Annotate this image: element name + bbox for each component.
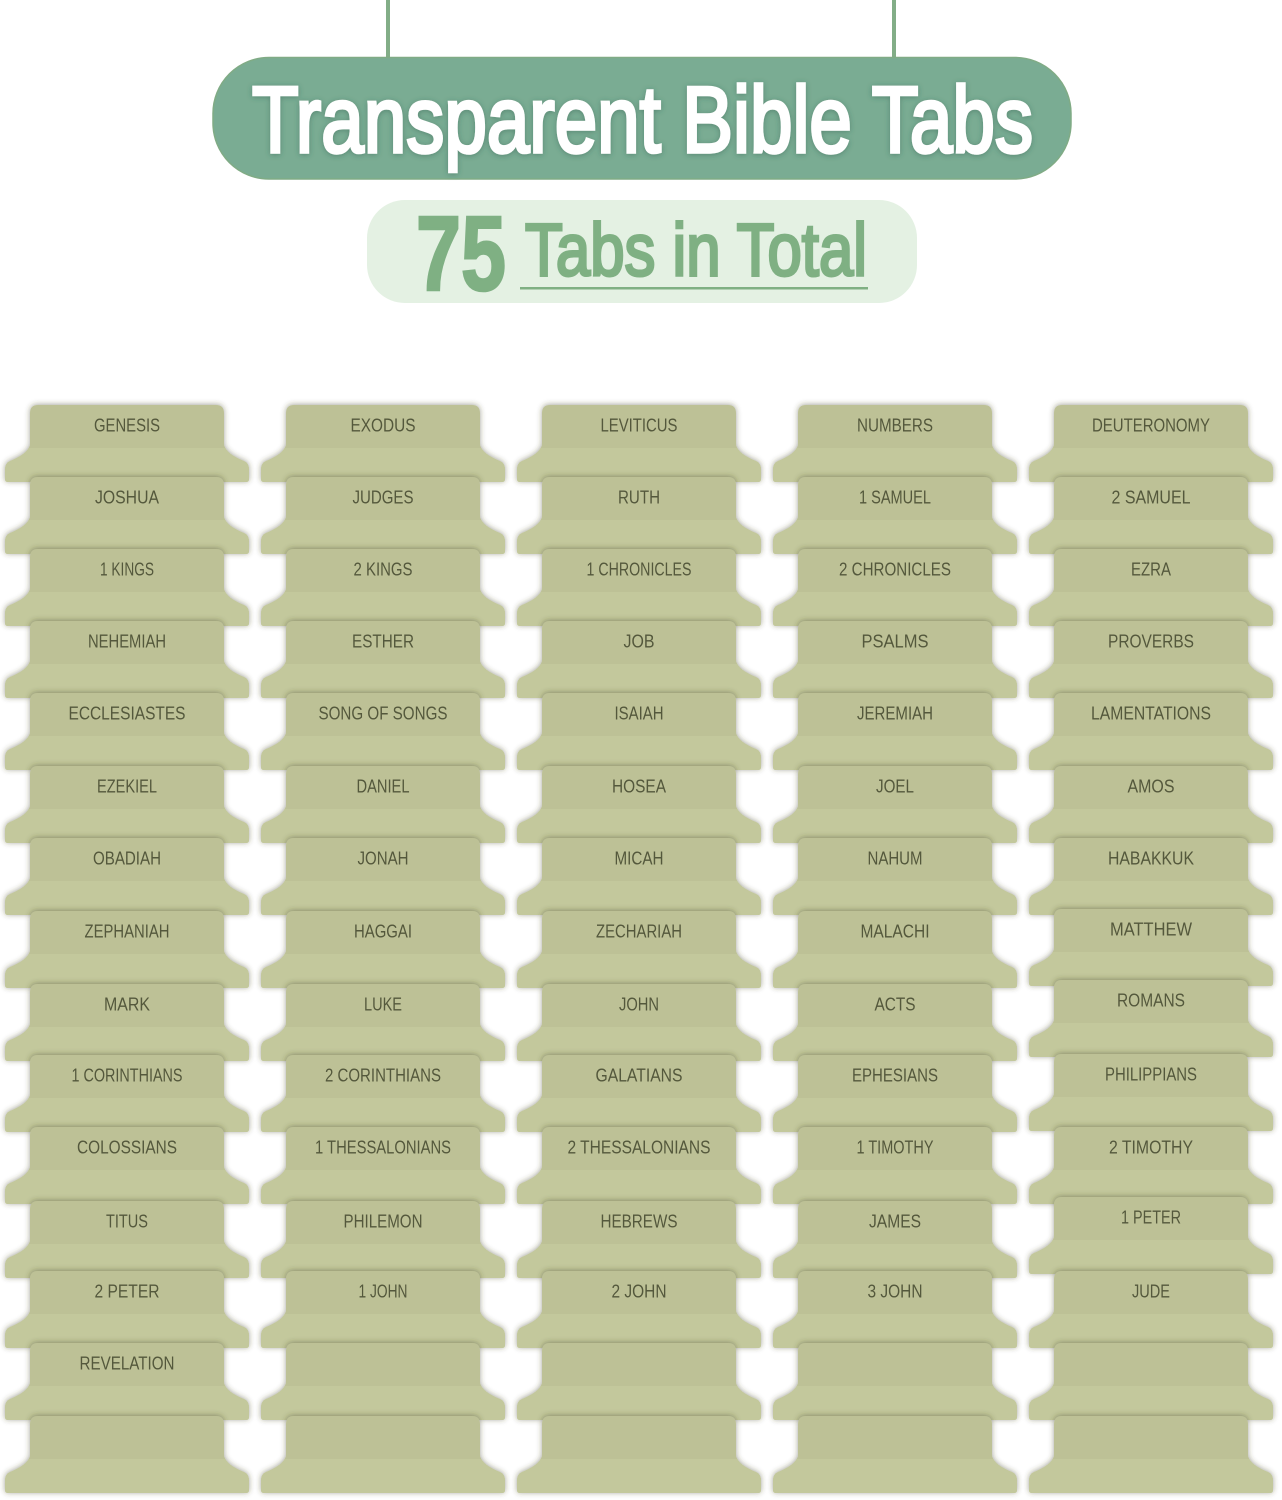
tab: Nahum	[772, 838, 1018, 916]
tab: Titus	[4, 1201, 250, 1279]
tab: 1 Timothy	[772, 1127, 1018, 1205]
tab: 2 Peter: 2 PETER	[94, 1282, 160, 1302]
tab: Esther: ESTHER	[352, 632, 414, 652]
tab: 2 Corinthians: 2 CORINTHIANS	[325, 1066, 441, 1086]
blank tab	[516, 1343, 762, 1421]
tab: Philippians	[1028, 1054, 1274, 1132]
tab: Romans: ROMANS	[1117, 990, 1185, 1010]
tab: Isaiah: ISAIAH	[614, 704, 664, 724]
tab: 2 Thessalonians: 2 THESSALONIANS	[568, 1138, 710, 1158]
tab: Hebrews	[516, 1201, 762, 1279]
tab: Ezekiel: EZEKIEL	[97, 776, 157, 796]
tab: Deuteronomy	[1028, 405, 1274, 483]
tab: Romans	[1028, 980, 1274, 1058]
tab: Lamentations	[1028, 693, 1274, 771]
tab: Jude	[1028, 1271, 1274, 1349]
tab: Philemon: PHILEMON	[344, 1212, 422, 1232]
tab: 1 Thessalonians	[260, 1127, 506, 1205]
tab: Deuteronomy: DEUTERONOMY	[1092, 416, 1210, 436]
tab column 4	[772, 405, 1018, 1494]
tab: Song of Songs: SONG OF SONGS	[318, 704, 448, 724]
tab: James	[772, 1201, 1018, 1279]
subtitle text: Tabs in Total	[525, 208, 867, 292]
tab: 1 Peter: 1 PETER	[1121, 1208, 1181, 1228]
tab: 2 Kings	[260, 549, 506, 627]
tab: Zechariah	[516, 911, 762, 989]
tab: 1 Kings: 1 KINGS	[100, 560, 154, 580]
tab: Colossians	[4, 1127, 250, 1205]
tab: John: JOHN	[619, 994, 659, 1014]
tab: Proverbs: PROVERBS	[1108, 632, 1194, 652]
tab: Exodus	[260, 405, 506, 483]
tab: Matthew: MATTHEW	[1110, 920, 1192, 940]
tab: Judges	[260, 477, 506, 555]
tab: Nahum: NAHUM	[868, 848, 922, 868]
tab: Jonah: JONAH	[358, 848, 408, 868]
tab: Mark	[4, 984, 250, 1062]
tab: Jeremiah: JEREMIAH	[857, 704, 933, 724]
tab: Colossians: COLOSSIANS	[77, 1138, 177, 1158]
tab: Numbers: NUMBERS	[857, 416, 933, 436]
tab: Esther	[260, 621, 506, 699]
tab: Psalms: PSALMS	[862, 632, 928, 652]
blank tab	[772, 1343, 1018, 1421]
tab: Micah	[516, 838, 762, 916]
blank tab	[260, 1416, 506, 1494]
tab: 2 Samuel: 2 SAMUEL	[1112, 488, 1190, 508]
tab: 1 Chronicles	[516, 549, 762, 627]
tab: 2 Chronicles	[772, 549, 1018, 627]
subtitle badge	[367, 195, 917, 313]
subtitle underline	[520, 287, 868, 290]
tab: Philippians: PHILIPPIANS	[1105, 1064, 1197, 1084]
tab count number: 75	[416, 195, 506, 313]
tab: Lamentations: LAMENTATIONS	[1091, 704, 1211, 724]
tab: Ruth	[516, 477, 762, 555]
tab: Amos	[1028, 766, 1274, 844]
tab: Luke	[260, 984, 506, 1062]
tab: Malachi	[772, 911, 1018, 989]
tab column 5	[1028, 405, 1274, 1494]
tab: Ephesians	[772, 1055, 1018, 1133]
tab: 1 Kings	[4, 549, 250, 627]
tab: Nehemiah: NEHEMIAH	[88, 632, 166, 652]
tab: Hosea	[516, 766, 762, 844]
tab column 3	[516, 405, 762, 1494]
tab column 2	[260, 405, 506, 1494]
tab: Revelation: REVELATION	[80, 1354, 174, 1374]
tab column 1	[4, 405, 250, 1494]
tab: Acts	[772, 984, 1018, 1062]
tab: Luke: LUKE	[364, 994, 402, 1014]
title banner	[213, 58, 1071, 179]
tab: Leviticus	[516, 405, 762, 483]
tab: 1 Timothy: 1 TIMOTHY	[856, 1138, 934, 1158]
tab: Revelation	[4, 1343, 250, 1421]
blank tab	[516, 1416, 762, 1494]
blank tab	[1028, 1416, 1274, 1494]
blank tab	[4, 1416, 250, 1494]
tab: Isaiah	[516, 693, 762, 771]
tab: Joel	[772, 766, 1018, 844]
tab: James: JAMES	[869, 1212, 921, 1232]
tab: 1 John: 1 JOHN	[358, 1282, 408, 1302]
tab: Ezekiel	[4, 766, 250, 844]
tab: Proverbs	[1028, 621, 1274, 699]
tab: Matthew	[1028, 909, 1274, 987]
tab: 2 John: 2 JOHN	[612, 1282, 666, 1302]
tab: Philemon	[260, 1201, 506, 1279]
tab: Daniel: DANIEL	[356, 776, 410, 796]
tab: 2 Peter	[4, 1271, 250, 1349]
tab: Habakkuk: HABAKKUK	[1108, 848, 1194, 868]
tab: Titus: TITUS	[106, 1212, 148, 1232]
tab: Ruth: RUTH	[618, 488, 660, 508]
tab: Job	[516, 621, 762, 699]
tab: Obadiah: OBADIAH	[93, 848, 161, 868]
tab: 1 Corinthians: 1 CORINTHIANS	[72, 1066, 182, 1086]
tab: Obadiah	[4, 838, 250, 916]
tab: Haggai: HAGGAI	[354, 922, 412, 942]
tab: Galatians	[516, 1055, 762, 1133]
tab: Job: JOB	[624, 632, 654, 652]
tab: Ecclesiastes: ECCLESIASTES	[68, 704, 186, 724]
tab: 2 Chronicles: 2 CHRONICLES	[839, 560, 951, 580]
tab: Acts: ACTS	[874, 994, 916, 1014]
tab: Leviticus: LEVITICUS	[600, 416, 678, 436]
tab: Ezra: EZRA	[1131, 560, 1171, 580]
tab: Psalms	[772, 621, 1018, 699]
tab: Zechariah: ZECHARIAH	[596, 922, 682, 942]
blank tab	[1028, 1343, 1274, 1421]
tab: Genesis	[4, 405, 250, 483]
tab: Ezra	[1028, 549, 1274, 627]
tab: 2 Corinthians	[260, 1055, 506, 1133]
tab: 2 Samuel	[1028, 477, 1274, 555]
hanging line left	[386, 0, 390, 58]
tab: Joshua: JOSHUA	[95, 488, 159, 508]
tab: 3 John	[772, 1271, 1018, 1349]
tab: Malachi: MALACHI	[860, 922, 930, 942]
tab: Nehemiah	[4, 621, 250, 699]
tab: 1 Samuel: 1 SAMUEL	[859, 488, 931, 508]
tab: Mark: MARK	[104, 994, 150, 1014]
tab: 2 Timothy: 2 TIMOTHY	[1109, 1138, 1193, 1158]
tab: Hebrews: HEBREWS	[600, 1212, 678, 1232]
tab: Haggai	[260, 911, 506, 989]
tab: Amos: AMOS	[1128, 776, 1174, 796]
hanging line right	[892, 0, 896, 58]
tab: Habakkuk	[1028, 838, 1274, 916]
tab: 2 Kings: 2 KINGS	[354, 560, 412, 580]
tab: Jeremiah	[772, 693, 1018, 771]
tab: Jude: JUDE	[1132, 1282, 1170, 1302]
blank tab	[772, 1416, 1018, 1494]
tab: 1 Thessalonians: 1 THESSALONIANS	[315, 1138, 451, 1158]
tab: Ecclesiastes	[4, 693, 250, 771]
tab: 2 John	[516, 1271, 762, 1349]
blank tab	[260, 1343, 506, 1421]
tab: Exodus: EXODUS	[350, 416, 416, 436]
tab: Ephesians: EPHESIANS	[852, 1066, 938, 1086]
tab: Zephaniah: ZEPHANIAH	[84, 922, 170, 942]
title text: Transparent Bible Tabs	[252, 67, 1033, 172]
tab: 1 John	[260, 1271, 506, 1349]
tab: Song of Songs	[260, 693, 506, 771]
tab: 1 Chronicles: 1 CHRONICLES	[586, 560, 692, 580]
tab: 3 John: 3 JOHN	[868, 1282, 922, 1302]
tab: Joshua	[4, 477, 250, 555]
tab: Zephaniah	[4, 911, 250, 989]
tab: Joel: JOEL	[876, 776, 914, 796]
tab: Numbers	[772, 405, 1018, 483]
tab: John	[516, 984, 762, 1062]
tab: 1 Corinthians	[4, 1055, 250, 1133]
tab: Hosea: HOSEA	[612, 776, 666, 796]
tab: Daniel	[260, 766, 506, 844]
tab: Micah: MICAH	[614, 848, 664, 868]
tab: Galatians: GALATIANS	[596, 1066, 682, 1086]
tab: 1 Samuel	[772, 477, 1018, 555]
tab: 2 Thessalonians	[516, 1127, 762, 1205]
tab: 1 Peter	[1028, 1197, 1274, 1275]
tab: Genesis: GENESIS	[94, 416, 160, 436]
tab: Jonah	[260, 838, 506, 916]
tab: Judges: JUDGES	[352, 488, 414, 508]
tab: 2 Timothy	[1028, 1127, 1274, 1205]
